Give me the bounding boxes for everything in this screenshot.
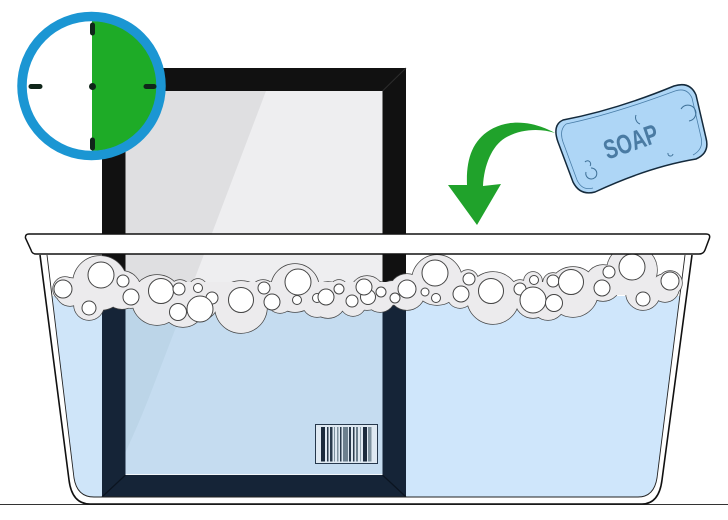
tub inner wall <box>47 255 685 497</box>
tub rim <box>25 234 710 254</box>
foam body <box>53 245 682 333</box>
water left of frame <box>52 296 102 496</box>
foam outline <box>53 245 682 333</box>
clock face <box>22 16 162 156</box>
green arrow <box>448 123 555 225</box>
soap inner edge <box>562 90 702 189</box>
tub water <box>40 296 696 497</box>
soap foam <box>53 245 682 333</box>
submerged reflection <box>126 309 176 451</box>
elapsed time wedge <box>92 21 157 151</box>
glass pane <box>126 91 382 474</box>
clock ring <box>22 16 161 156</box>
picture frame <box>102 68 406 497</box>
tub outer wall <box>40 255 692 504</box>
foam bubbles <box>54 254 679 322</box>
clock ticks <box>31 25 154 148</box>
soap suds <box>585 105 696 179</box>
glass reflection <box>126 91 266 452</box>
barcode <box>316 424 378 464</box>
water right of frame <box>406 296 696 497</box>
frame bevel <box>382 68 406 91</box>
soap body <box>556 85 707 193</box>
floor line <box>0 504 728 506</box>
frame border <box>102 68 406 497</box>
bevel corners <box>102 475 406 497</box>
submerged glass <box>126 296 382 474</box>
submerged frame border <box>102 296 406 497</box>
soap label: SOAP <box>600 119 662 165</box>
soap bar <box>556 85 707 193</box>
clock centre <box>89 83 96 90</box>
tub outline <box>40 255 692 504</box>
clock icon <box>22 16 162 156</box>
glass bottom edge <box>126 474 382 475</box>
